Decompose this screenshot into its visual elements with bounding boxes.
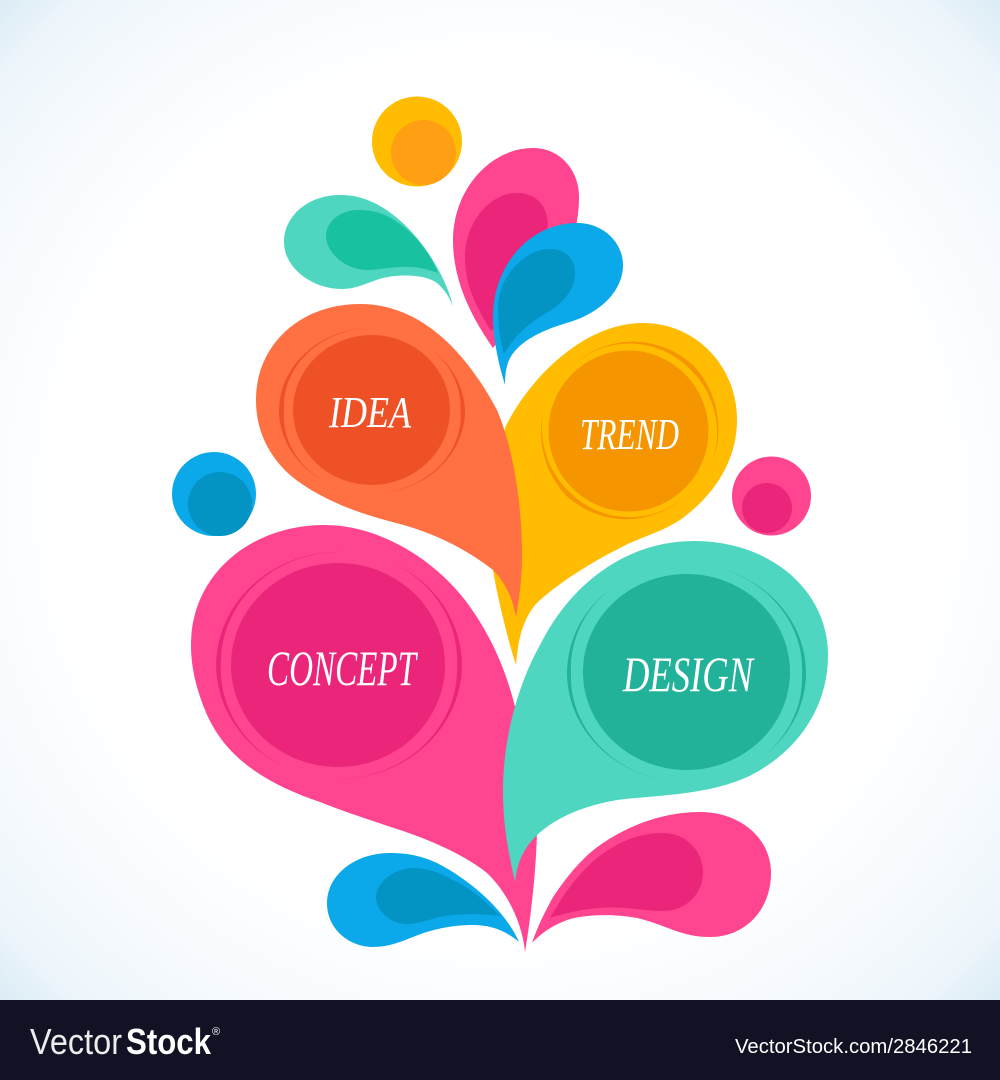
design inner circle <box>583 574 790 770</box>
trend inner circle <box>548 350 708 512</box>
footer logo: Vector <box>30 1021 122 1062</box>
concept inner circle <box>231 563 445 767</box>
concept label: CONCEPT <box>267 640 418 696</box>
panel: trend drop <box>493 323 737 665</box>
footer logo <box>30 1021 220 1062</box>
icon: bottom blue drop <box>327 853 519 947</box>
icon: small pink drop <box>453 148 579 348</box>
design ring arcs <box>567 564 806 782</box>
icon: bottom pink drop <box>532 812 771 943</box>
concept ring arcs <box>216 552 462 779</box>
footer logo: Stock <box>126 1021 212 1062</box>
icon: blue circle <box>172 452 256 536</box>
panel: idea drop <box>256 304 522 617</box>
trend ring arcs <box>541 342 718 519</box>
icon: pink circle <box>732 456 811 536</box>
footer url: VectorStock.com/2846221 <box>735 1036 972 1058</box>
icon: small blue drop <box>493 223 623 385</box>
panel: design drop <box>503 541 828 882</box>
idea label: IDEA <box>328 388 412 437</box>
footer logo: ® <box>212 1026 220 1038</box>
design label: DESIGN <box>622 646 755 702</box>
idea inner circle <box>293 335 450 485</box>
footer bar <box>0 1000 1000 1080</box>
icon: small teal drop <box>284 195 453 307</box>
panel: concept drop <box>191 525 537 952</box>
trend label: TREND <box>580 410 679 459</box>
icon: yellow circle <box>372 96 462 186</box>
idea ring arcs <box>279 328 465 493</box>
